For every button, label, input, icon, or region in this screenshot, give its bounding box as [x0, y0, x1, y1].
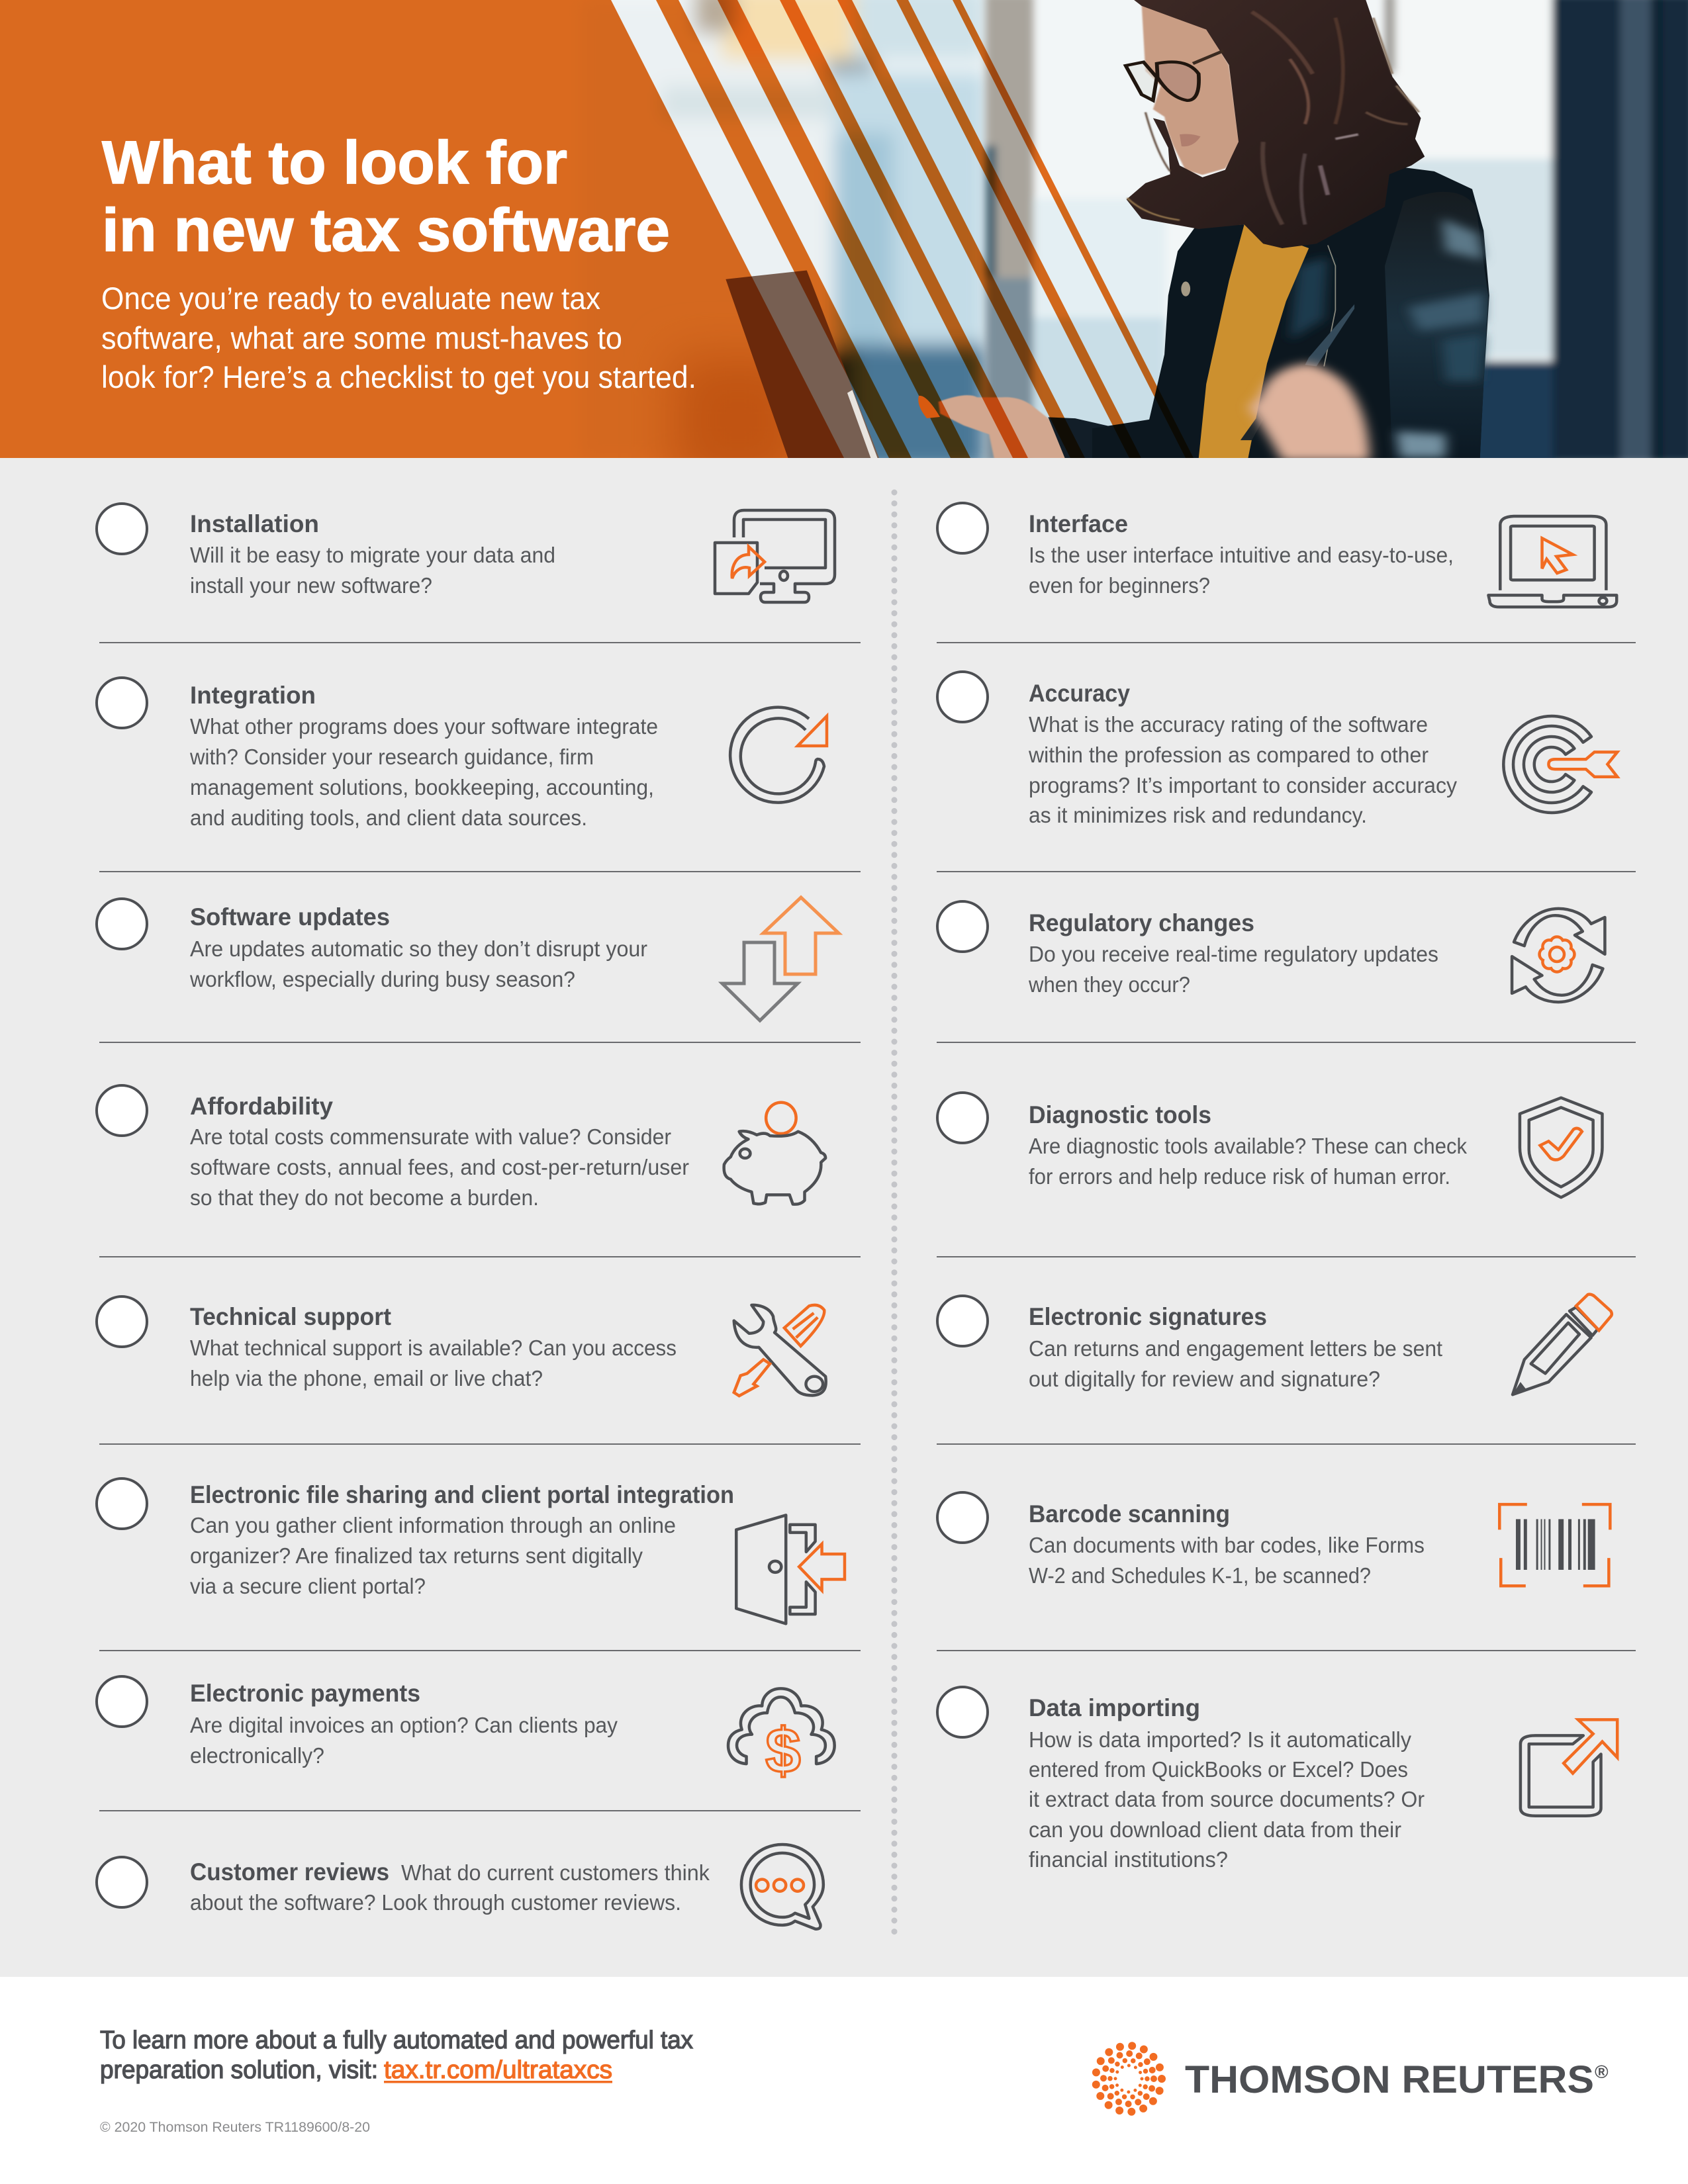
footer call to action	[100, 2026, 693, 2084]
Thomson Reuters logo: THOMSON REUTERS	[1185, 2058, 1594, 2101]
item: Installation: Will it be easy to migrate your data and	[190, 543, 555, 567]
icon: export arrow	[1521, 1719, 1617, 1816]
item: Accuracy: What is the accuracy rating of the software	[1029, 712, 1428, 737]
item: Interface	[937, 503, 1617, 607]
item: Barcode scanning: Barcode scanning	[1029, 1500, 1230, 1527]
item: Electronic payments: electronically?	[190, 1743, 324, 1768]
item: Technical support: Technical support	[190, 1303, 391, 1330]
item: Electronic signatures: Electronic signatures	[1029, 1303, 1267, 1330]
icon: cycle arrows with gear	[1512, 909, 1605, 1002]
Thomson Reuters logo	[1096, 2046, 1609, 2112]
item: Data importing: can you download client data from their	[1029, 1817, 1401, 1842]
orange pen in hand	[918, 396, 940, 418]
Thomson Reuters logo: ®	[1595, 2062, 1609, 2082]
footer call to action: tax.tr.com/ultrataxcs	[384, 2056, 612, 2084]
item: Software updates: Software updates	[190, 903, 390, 931]
hair strands	[1127, 12, 1419, 224]
icon: cloud with dollar	[728, 1688, 835, 1786]
item: Customer reviews: about the software? Look through customer reviews.	[190, 1890, 681, 1915]
title: in new tax software	[102, 197, 670, 264]
item: Electronic file sharing: Electronic file sharing and client portal integration	[190, 1481, 734, 1508]
item: Data importing: Data importing	[1029, 1694, 1200, 1721]
laptop	[726, 270, 879, 459]
item: Software updates: Are updates automatic so they don’t disrupt your	[190, 936, 647, 961]
item: Electronic signatures: out digitally for review and signature?	[1029, 1367, 1380, 1391]
item: Affordability: so that they do not become a burden.	[190, 1185, 539, 1210]
item: Integration: Integration	[190, 682, 316, 709]
item: Affordability: Are total costs commensurate with value? Consider	[190, 1124, 671, 1149]
item: Accuracy	[937, 672, 1617, 827]
item: Accuracy: as it minimizes risk and redundancy.	[1029, 803, 1367, 827]
item: Diagnostic tools: for errors and help reduce risk of human error.	[1029, 1164, 1450, 1189]
item: Electronic signatures	[937, 1295, 1612, 1394]
icon: wrench and screwdriver	[734, 1305, 826, 1396]
item: Affordability: Affordability	[190, 1093, 333, 1120]
icon: laptop with cursor	[1488, 516, 1617, 607]
icon: target with arrow	[1503, 716, 1617, 813]
item: Diagnostic tools: Are diagnostic tools available? These can check	[1029, 1134, 1467, 1158]
item: Electronic signatures: Can returns and engagement letters be sent	[1029, 1336, 1442, 1361]
item: Affordability	[97, 1085, 825, 1210]
copyright: © 2020 Thomson Reuters TR1189600/8-20	[100, 2120, 370, 2135]
item: Regulatory changes: Do you receive real-time regulatory updates	[1029, 942, 1438, 966]
item: Affordability: software costs, annual fees, and cost-per-return/user	[190, 1155, 689, 1179]
item: Software updates	[97, 897, 839, 1021]
header photo	[0, 0, 1688, 483]
item: Interface: Is the user interface intuitive and easy-to-use,	[1029, 543, 1454, 567]
item: Data importing: financial institutions?	[1029, 1847, 1228, 1872]
item: Accuracy: programs? It’s important to consider accuracy	[1029, 773, 1457, 797]
item: Regulatory changes: Regulatory changes	[1029, 909, 1254, 936]
item: Integration: and auditing tools, and client data sources.	[190, 805, 587, 830]
item: Electronic file sharing: via a secure client portal?	[190, 1574, 426, 1598]
item: Regulatory changes	[937, 901, 1605, 1002]
item: Barcode scanning: W-2 and Schedules K-1, be scanned?	[1029, 1563, 1371, 1588]
item: Diagnostic tools: Diagnostic tools	[1029, 1101, 1211, 1128]
item: Electronic file sharing: Can you gather client information through an online	[190, 1513, 676, 1537]
item: Barcode scanning: Can documents with bar codes, like Forms	[1029, 1533, 1425, 1557]
item: Data importing: How is data imported? Is it automatically	[1029, 1727, 1411, 1752]
item: Integration: What other programs does your software integrate	[190, 714, 658, 739]
header banner	[0, 0, 1688, 483]
icon: refresh loop	[730, 707, 827, 803]
icon: barcode	[1499, 1504, 1610, 1586]
checklist panel	[0, 458, 1688, 1977]
item: Barcode scanning	[937, 1492, 1610, 1588]
subtitle: Once you’re ready to evaluate new tax	[101, 281, 600, 316]
item: Integration: with? Consider your research guidance, firm	[189, 745, 594, 769]
icon: monitor with file	[715, 510, 835, 602]
item: Electronic file sharing: organizer? Are finalized tax returns sent digitally	[190, 1543, 643, 1568]
hand on laptop	[939, 395, 1125, 459]
item: Electronic payments: Electronic payments	[190, 1680, 420, 1707]
item: Data importing	[937, 1687, 1617, 1872]
item: Regulatory changes: when they occur?	[1028, 972, 1190, 997]
icon: speech bubble	[741, 1844, 823, 1929]
item: Customer reviews: What do current customers think	[401, 1860, 710, 1885]
woman	[1092, 0, 1489, 461]
item: Data importing: entered from QuickBooks or Excel? Does	[1029, 1757, 1408, 1782]
icon: door with arrow	[736, 1515, 845, 1623]
item: Interface: even for beginners?	[1029, 573, 1210, 598]
warm tint behind lower orange	[667, 352, 788, 458]
item: Customer reviews	[97, 1844, 823, 1929]
item: Accuracy: within the profession as compared to other	[1028, 743, 1429, 767]
item: Accuracy: Accuracy	[1029, 680, 1130, 707]
item: Installation: Installation	[190, 510, 319, 537]
footer call to action: To learn more about a fully automated and powerful tax	[100, 2026, 693, 2054]
item: Integration: management solutions, bookkeeping, accounting,	[190, 775, 654, 799]
icon: shield with check	[1520, 1098, 1602, 1197]
logo mark	[1096, 2046, 1162, 2112]
item: Electronic payments: Are digital invoices an option? Can clients pay	[190, 1713, 618, 1737]
glasses	[1126, 51, 1223, 101]
orange panel and diagonal stripes	[0, 0, 1194, 458]
item: Integration	[97, 678, 827, 830]
subtitle: software, what are some must-haves to	[101, 320, 622, 355]
icon: up and down arrows	[722, 897, 839, 1021]
subtitle: look for? Here’s a checklist to get you started.	[101, 359, 696, 394]
item: Installation: install your new software?	[190, 573, 432, 598]
item: Installation	[97, 504, 835, 602]
subtitle	[101, 281, 696, 394]
icon: cloud with dollar: $	[765, 1715, 801, 1786]
item: Customer reviews: Customer reviews	[190, 1858, 389, 1886]
item: Data importing: it extract data from source documents? Or	[1029, 1787, 1425, 1811]
footer call to action: preparation solution, visit:	[100, 2056, 378, 2084]
item: Software updates: workflow, especially during busy season?	[189, 967, 575, 991]
icon: piggy bank	[724, 1103, 825, 1205]
item: Technical support	[97, 1297, 826, 1396]
icon: pencil	[1513, 1295, 1612, 1394]
title	[101, 139, 669, 252]
title: What to look for	[102, 129, 567, 197]
item: Diagnostic tools	[937, 1093, 1602, 1197]
item: Technical support: What technical support is available? Can you access	[190, 1336, 677, 1360]
item: Technical support: help via the phone, email or live chat?	[190, 1366, 543, 1390]
item: Electronic payments	[97, 1676, 835, 1786]
item: Electronic file sharing	[97, 1479, 845, 1623]
item: Interface: Interface	[1029, 510, 1128, 537]
